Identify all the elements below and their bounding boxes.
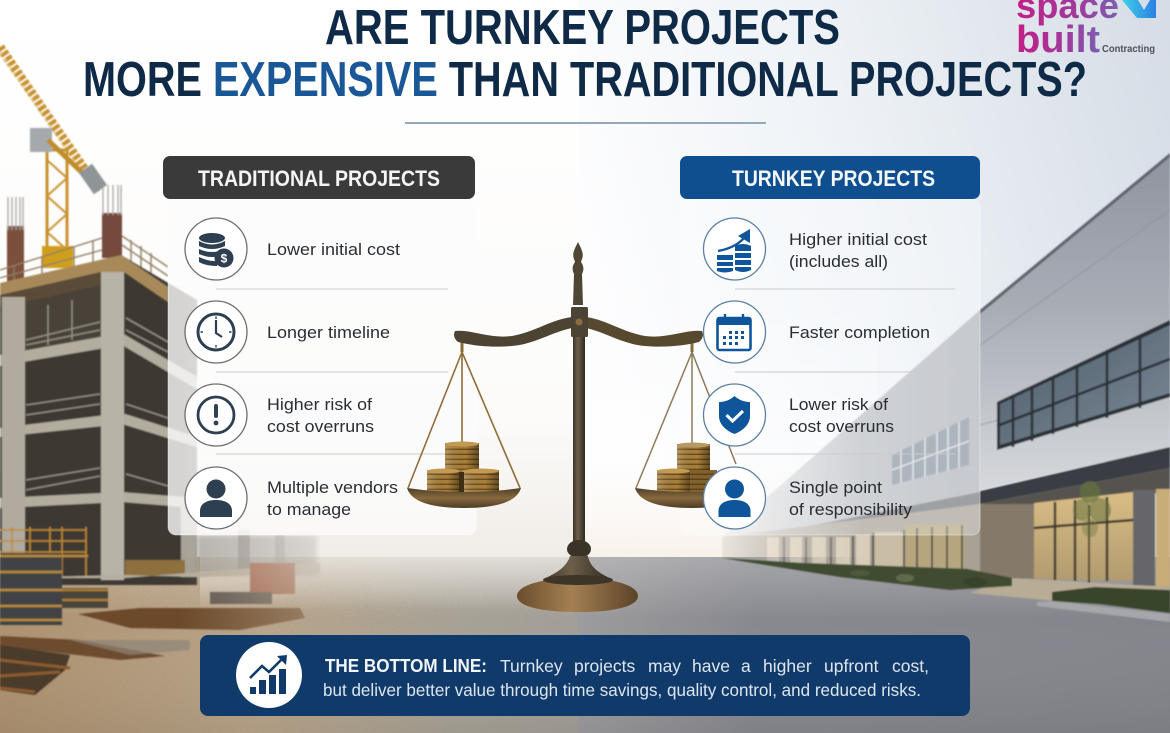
scaffolding <box>0 527 86 578</box>
heading: turnkey projects: TURNKEY PROJECTS <box>732 166 935 191</box>
icon: shield check <box>704 384 766 446</box>
row: higher risk of cost overruns: Higher risk of <box>267 395 372 414</box>
balance scale with coins <box>407 242 749 612</box>
row: faster completion: Faster completion <box>789 323 930 342</box>
finial <box>573 242 583 305</box>
row: lower risk of cost overruns: cost overruns <box>789 417 894 436</box>
logo: Space Built Contracting: Contracting <box>1102 43 1155 55</box>
row: lower initial cost: Lower initial cost <box>267 240 400 259</box>
row: longer timeline <box>185 301 390 363</box>
logo: Space Built Contracting: built <box>1016 19 1100 61</box>
row: single point of responsibility: of responsibility <box>789 500 913 519</box>
beam <box>454 317 572 347</box>
row: higher initial cost: Higher initial cost <box>789 230 927 249</box>
row: single point of responsibility <box>704 467 913 529</box>
panel: traditional projects background <box>168 199 476 535</box>
left pan <box>407 488 521 508</box>
knob and cone <box>567 540 591 558</box>
callout: the bottom line <box>200 635 970 716</box>
base <box>517 578 638 612</box>
heading: traditional projects: TRADITIONAL PROJECTS <box>198 166 440 191</box>
left coins <box>427 442 499 496</box>
callout text <box>323 656 929 700</box>
row: faster completion <box>704 301 930 363</box>
logo: Space Built Contracting <box>1016 0 1156 61</box>
rebar columns <box>0 185 168 285</box>
row: longer timeline: Longer timeline <box>267 323 390 342</box>
icon: person <box>704 467 766 529</box>
row: higher initial cost: (includes all) <box>789 252 888 271</box>
heading: traditional projects <box>163 156 475 199</box>
callout text: THE BOTTOM LINE: <box>325 656 487 676</box>
canopy <box>980 447 1170 504</box>
row: multiple vendors to manage: Multiple vendors <box>267 478 398 497</box>
material stacks <box>0 553 62 625</box>
callout text: projects <box>574 656 636 676</box>
row: lower risk of cost overruns <box>704 384 894 446</box>
crane <box>0 47 107 268</box>
side facade windows <box>892 417 969 485</box>
panel: turnkey projects background <box>681 199 980 535</box>
callout text: higher <box>763 656 812 676</box>
title underline <box>405 122 766 124</box>
icon: clock <box>185 301 247 363</box>
right coins <box>657 442 717 496</box>
row: higher risk of cost overruns <box>185 384 374 446</box>
icon: person <box>185 467 247 529</box>
callout text: a <box>741 656 751 676</box>
icon: warning circle <box>185 384 247 446</box>
row: lower initial cost <box>185 218 400 280</box>
title <box>83 1 1087 107</box>
icon: calendar <box>704 301 766 363</box>
brick pallet <box>250 563 295 594</box>
callout text: Turnkey <box>500 656 563 676</box>
callout text: cost, <box>892 656 929 676</box>
row: lower risk of cost overruns: Lower risk of <box>789 395 888 414</box>
column <box>573 335 585 543</box>
heading: turnkey projects <box>680 156 980 199</box>
callout text: may <box>648 656 681 676</box>
row: multiple vendors to manage: to manage <box>267 500 351 519</box>
pivot block <box>571 307 588 337</box>
icon: rising bar chart <box>236 642 302 708</box>
main facade <box>980 157 1170 490</box>
row: higher risk of cost overruns: cost overruns <box>267 417 374 436</box>
railings <box>26 300 168 490</box>
callout text: upfront <box>824 656 879 676</box>
tree <box>1073 481 1111 590</box>
upper window band <box>997 320 1170 450</box>
photo: construction site with crane and concrete frame <box>0 47 320 695</box>
row: higher initial cost <box>704 218 927 280</box>
floors <box>0 255 197 585</box>
right pan <box>635 488 749 508</box>
icon: coin stack with dollar: $ <box>221 252 228 266</box>
left pan chains <box>408 352 520 488</box>
right pan chains <box>636 352 736 488</box>
storefront <box>980 504 1034 579</box>
icon: coin stack with dollar <box>185 218 247 280</box>
row: single point of responsibility: Single point <box>789 478 882 497</box>
pavement and hedges <box>722 558 1170 622</box>
callout text: but deliver better value through time savings, quality control, and reduced risks. <box>323 680 921 700</box>
row: multiple vendors to manage <box>185 467 398 529</box>
callout text: have <box>692 656 730 676</box>
timber piles <box>78 608 305 630</box>
icon: rising coins <box>704 218 766 280</box>
title: ARE TURNKEY PROJECTS <box>325 1 840 55</box>
photo: modern warehouse building <box>722 153 1170 622</box>
